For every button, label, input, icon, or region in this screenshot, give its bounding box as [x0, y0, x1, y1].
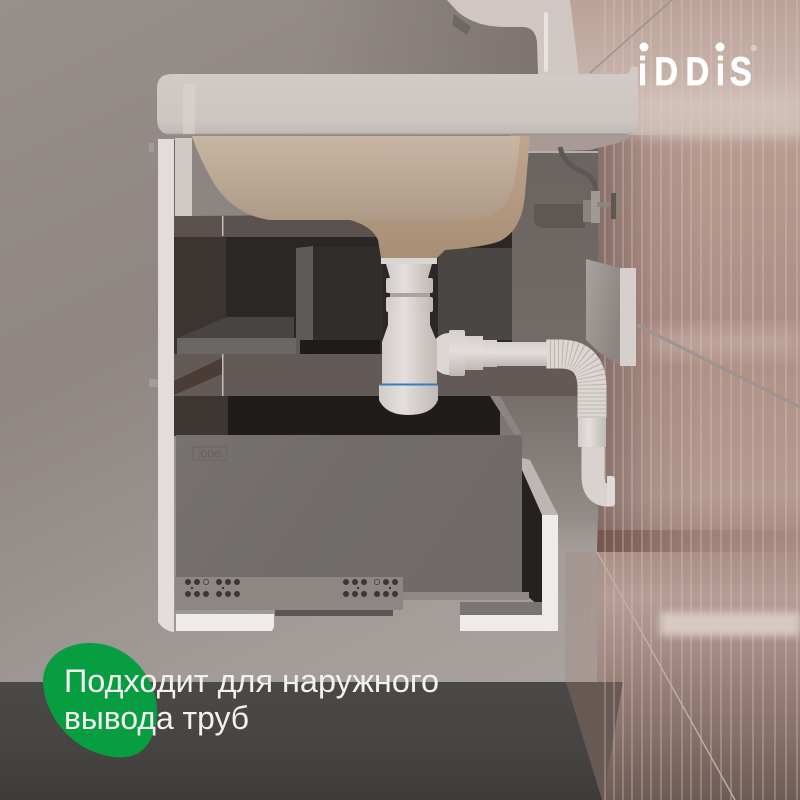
drawer logo mark: iDDiS [199, 449, 222, 459]
cabinet right side panel [460, 458, 558, 631]
iddis logo: iDDiS [638, 49, 752, 94]
bottle trap siphon [379, 258, 438, 415]
caption [64, 663, 439, 736]
supply hose and angle valve [534, 147, 616, 228]
sink slab [157, 66, 638, 135]
wall box [586, 259, 636, 366]
inner shelf [177, 246, 380, 356]
faucet [447, 0, 579, 74]
caption: Подходит для наружного [64, 663, 439, 699]
side pipe with nut [430, 330, 547, 376]
wall under the sink [174, 140, 598, 552]
iddis logo: ® [751, 44, 757, 53]
tiled wall [565, 0, 800, 800]
cabinet dark interior [174, 216, 599, 396]
cabinet bottom left block [176, 614, 274, 631]
drain outlet pipe [578, 418, 615, 506]
cabinet front strip [149, 138, 192, 632]
caption: вывода труб [64, 700, 249, 736]
floor [0, 682, 602, 800]
lower drawer interior [174, 396, 523, 437]
basin [192, 136, 530, 258]
drawer logo mark [193, 447, 227, 460]
sink underside [510, 135, 637, 152]
drawer rail with holes [175, 577, 403, 616]
drawer front [176, 435, 529, 600]
corrugated pipe [546, 354, 592, 418]
green blob [43, 643, 157, 757]
cabinet wall behind basin [192, 138, 260, 216]
